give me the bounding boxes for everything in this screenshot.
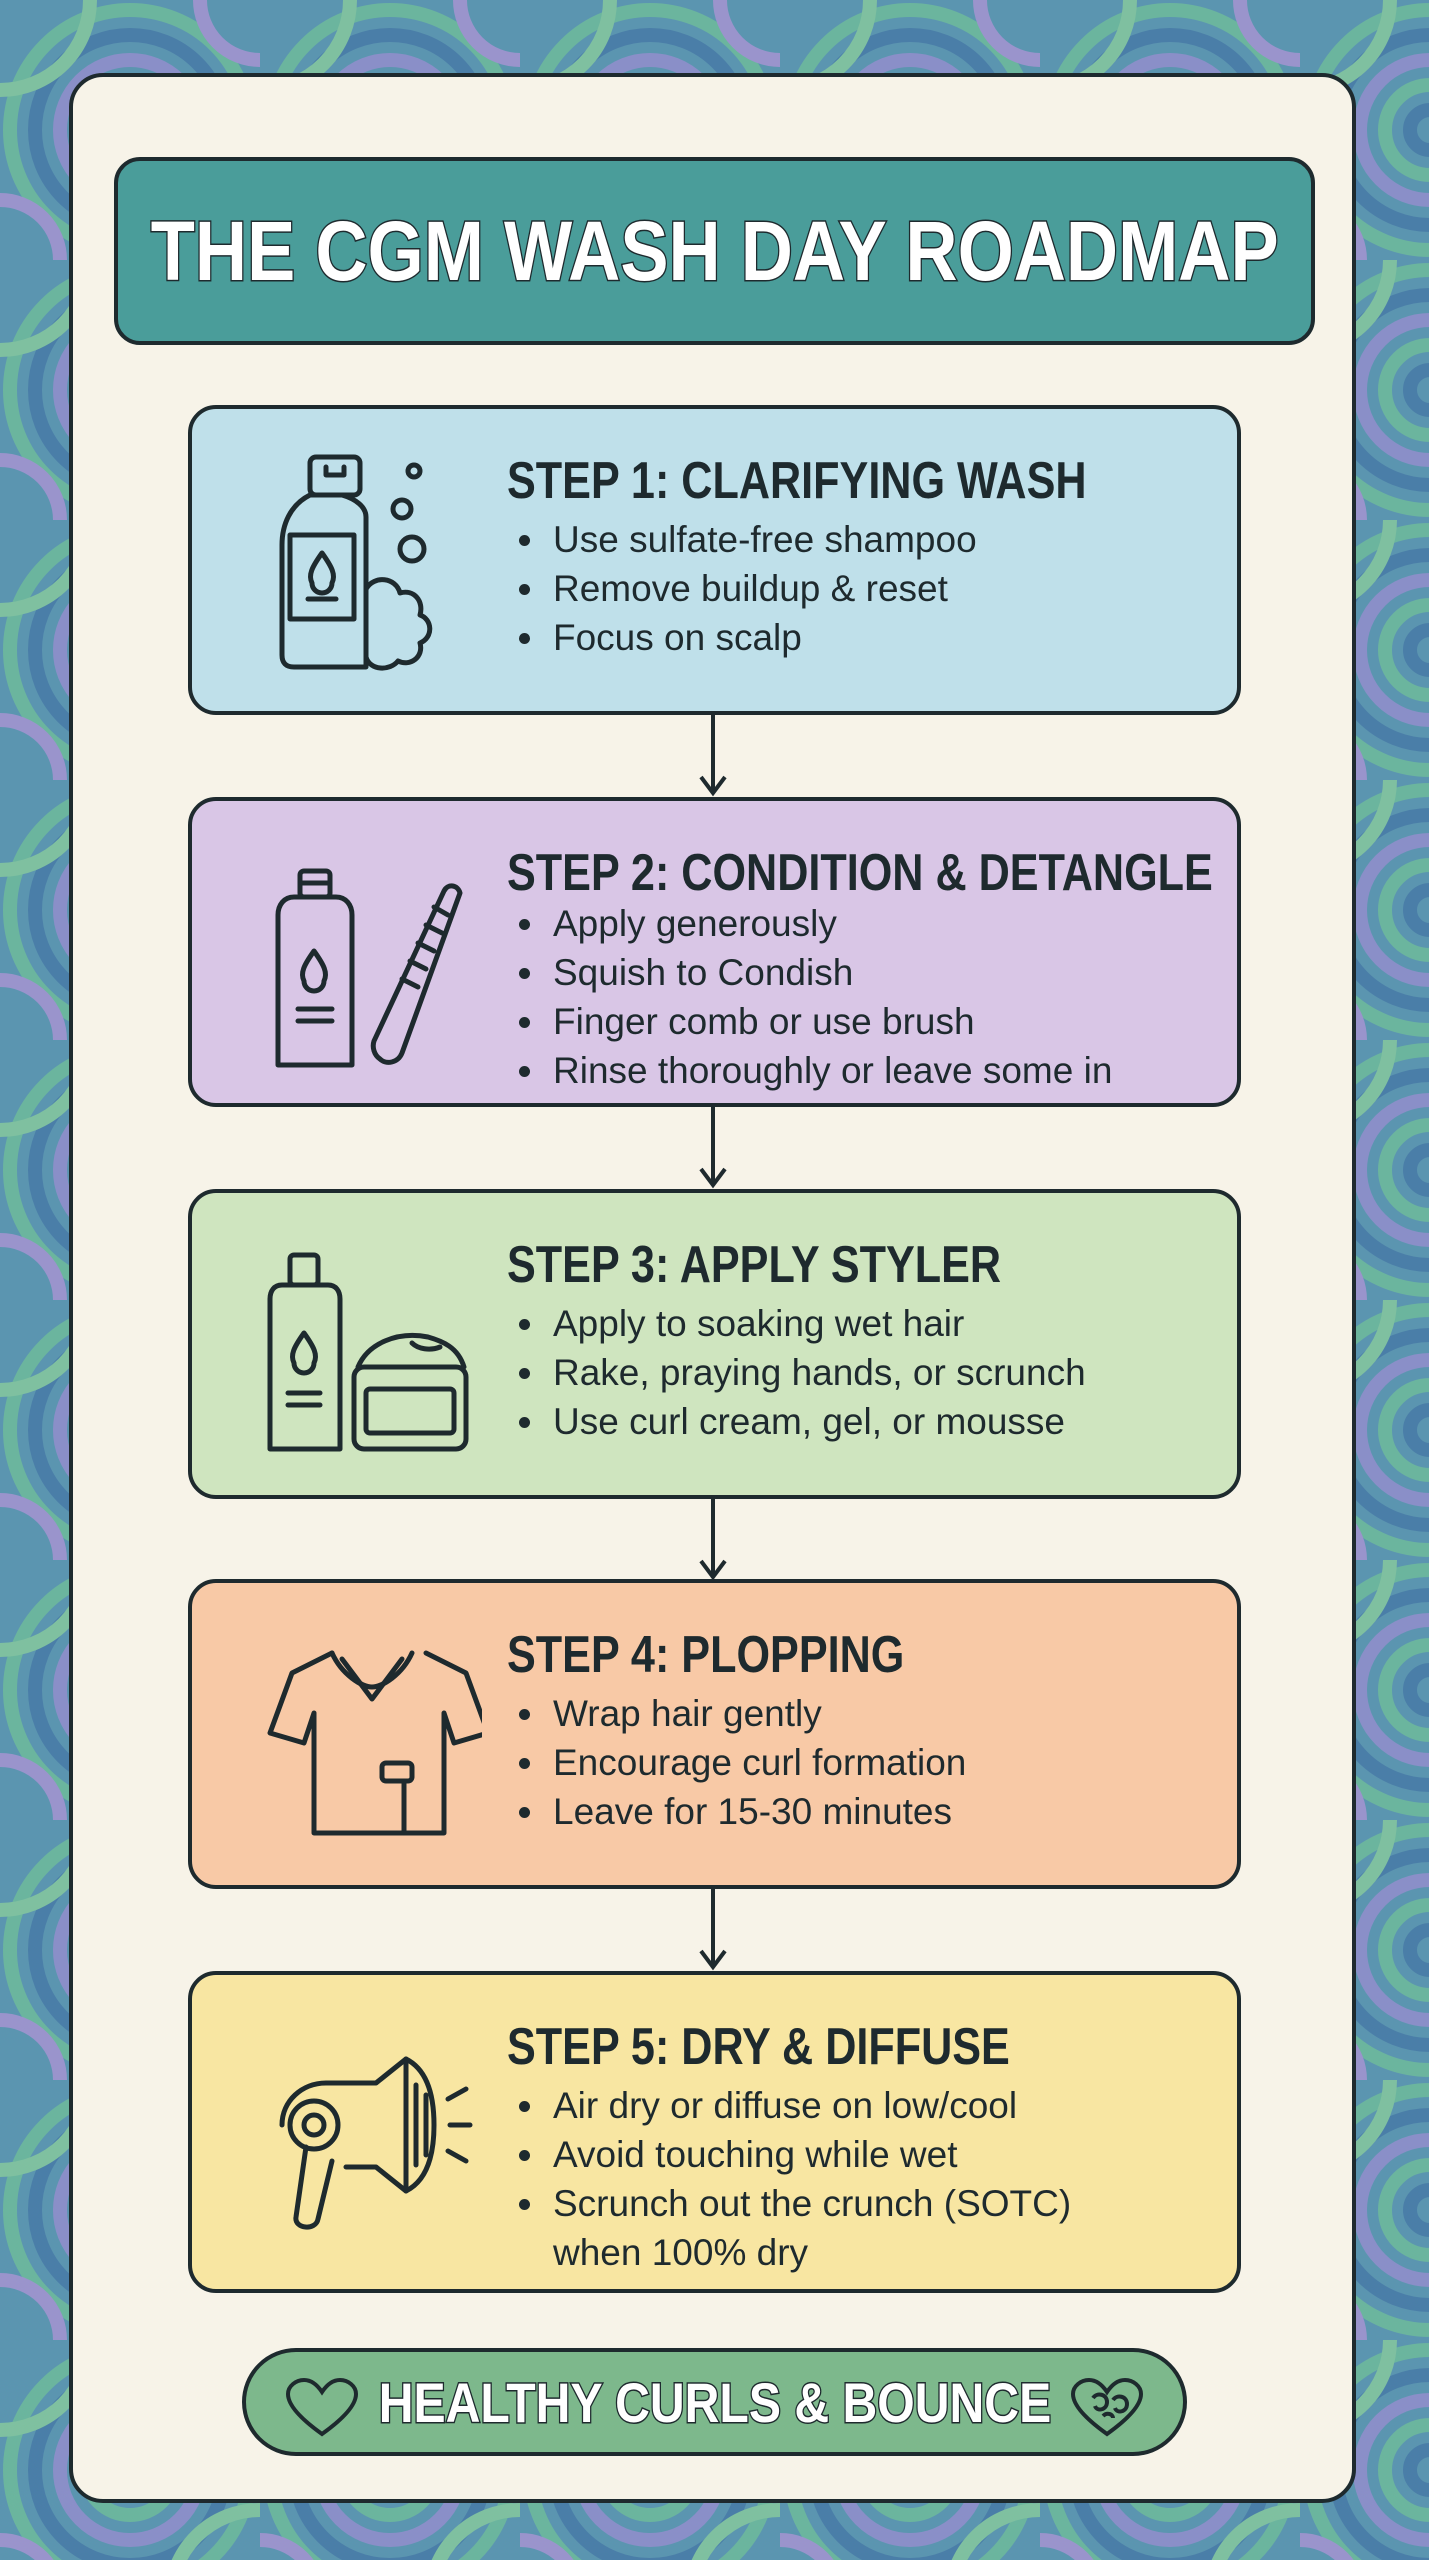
- arrow 3: [700, 1499, 726, 1579]
- panel: step 2: [188, 797, 1241, 1107]
- bullets: step 5: Scrunch out the crunch (SOTC): [553, 2183, 1071, 2224]
- heading: step 2: STEP 2: CONDITION & DETANGLE: [507, 844, 1213, 902]
- panel: step 5: [188, 1971, 1241, 2293]
- icon: conditioner bottle and comb: [276, 868, 462, 1068]
- panel: step 1: [188, 405, 1241, 715]
- arrow 2: [700, 1107, 726, 1188]
- bullets: step 2: Apply generously: [553, 903, 837, 944]
- heading: step 1: STEP 1: CLARIFYING WASH: [507, 452, 1087, 510]
- bullets: step 3: Use curl cream, gel, or mousse: [553, 1401, 1065, 1442]
- bullets: step 2: Finger comb or use brush: [553, 1001, 975, 1042]
- bullets: step 3: [519, 1303, 1086, 1442]
- icon: t-shirt: [268, 1650, 482, 1836]
- icon: swirl heart: [1071, 2378, 1143, 2436]
- bullets: step 1: Focus on scalp: [553, 617, 802, 658]
- footer pill: [242, 2348, 1187, 2456]
- icon: heart: [286, 2378, 358, 2436]
- icon: shampoo bottle with bubbles: [280, 454, 432, 671]
- icon: hair dryer with diffuser: [280, 2056, 472, 2230]
- arrow 1: [700, 715, 726, 796]
- bullets: step 4: [519, 1693, 966, 1832]
- bullets: step 2: Rinse thoroughly or leave some in: [553, 1050, 1112, 1091]
- bullets: step 5: Air dry or diffuse on low/cool: [553, 2085, 1017, 2126]
- bullets: step 2: Squish to Condish: [553, 952, 853, 993]
- panel: step 4: [188, 1579, 1241, 1889]
- icon: styler bottle and jar: [268, 1252, 468, 1452]
- title: THE CGM WASH DAY ROADMAP: [151, 204, 1278, 298]
- bullets: step 4: Leave for 15-30 minutes: [553, 1791, 952, 1832]
- bullets: step 2: [519, 903, 1112, 1091]
- panel: step 3: [188, 1189, 1241, 1499]
- title: [114, 157, 1315, 345]
- heading: step 3: STEP 3: APPLY STYLER: [507, 1236, 1001, 1294]
- footer pill: HEALTHY CURLS & BOUNCE: [378, 2370, 1051, 2434]
- bullets: step 3: Apply to soaking wet hair: [553, 1303, 964, 1344]
- arrow 4: [700, 1889, 726, 1970]
- bullets: step 5: when 100% dry: [553, 2232, 808, 2273]
- bullets: step 5: [519, 2085, 1071, 2273]
- bullets: step 5: Avoid touching while wet: [553, 2134, 958, 2175]
- heading: step 5: STEP 5: DRY & DIFFUSE: [507, 2018, 1010, 2076]
- bullets: step 1: Remove buildup & reset: [553, 568, 948, 609]
- heading: step 4: STEP 4: PLOPPING: [507, 1626, 904, 1684]
- bullets: step 1: Use sulfate-free shampoo: [553, 519, 977, 560]
- bullets: step 3: Rake, praying hands, or scrunch: [553, 1352, 1086, 1393]
- bullets: step 4: Encourage curl formation: [553, 1742, 966, 1783]
- bullets: step 1: [519, 519, 977, 658]
- bullets: step 4: Wrap hair gently: [553, 1693, 822, 1734]
